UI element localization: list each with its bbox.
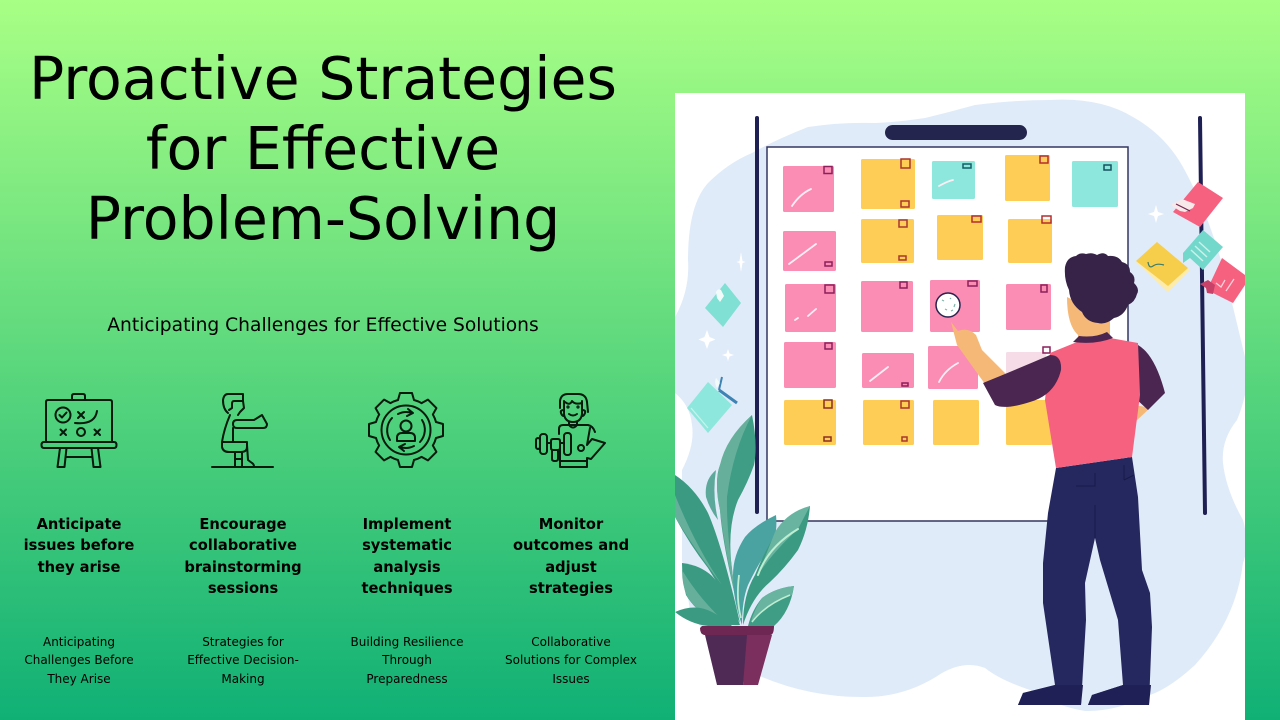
board handle <box>885 125 1027 140</box>
column heading 1 <box>24 516 134 576</box>
left pole <box>755 118 759 512</box>
lower-right leaf <box>748 586 794 626</box>
title: for Effective <box>146 114 500 182</box>
magnifier <box>936 293 960 317</box>
column heading 4: outcomes and <box>513 537 629 554</box>
column heading 3: Implement <box>363 516 451 533</box>
floating note: yellow <box>1136 242 1190 292</box>
column heading 2: collaborative <box>189 537 297 554</box>
right sleeve <box>1135 345 1165 410</box>
title <box>29 44 617 252</box>
pants and shoes <box>1018 457 1152 705</box>
plant <box>675 415 810 685</box>
neck <box>1067 297 1110 342</box>
right leaf <box>743 506 810 625</box>
icon: gear with person <box>368 392 444 468</box>
column heading 1: they arise <box>38 559 120 576</box>
column caption 3: Preparedness <box>366 672 448 686</box>
pants pockets <box>1076 465 1134 538</box>
column heading 1: Anticipate <box>37 516 121 533</box>
column caption 1: Anticipating <box>43 634 115 648</box>
column heading 2: brainstorming <box>184 559 302 576</box>
lower-left leaf <box>682 563 740 625</box>
column heading 4: Monitor <box>539 516 603 533</box>
column heading 3: systematic <box>362 537 452 554</box>
teal centre leaf <box>733 515 776 625</box>
column caption 4: Collaborative <box>531 634 611 648</box>
illustration: team at sticky-note board <box>675 93 1245 720</box>
column heading 4: adjust <box>545 559 597 576</box>
background blob <box>675 100 1246 711</box>
far-left leaf <box>675 475 740 623</box>
row 1 notes <box>783 155 1118 212</box>
column heading 3: analysis <box>373 559 441 576</box>
note scribbles <box>789 180 958 382</box>
column heading 2: Encourage <box>199 516 287 533</box>
column heading 1: issues before <box>24 537 134 554</box>
column caption 3 <box>351 634 463 686</box>
column caption 2 <box>187 634 299 686</box>
left sleeve <box>983 355 1061 407</box>
title: Proactive Strategies <box>29 44 617 112</box>
column heading 4: strategies <box>529 580 613 597</box>
tall leaf <box>717 415 756 600</box>
column caption 2: Making <box>221 672 265 686</box>
column caption 1 <box>24 634 134 686</box>
row 2 notes <box>783 215 1052 271</box>
collar <box>1073 332 1113 343</box>
right pole <box>1200 118 1205 513</box>
small back leaf <box>706 470 718 520</box>
board <box>767 147 1128 521</box>
column caption 4: Solutions for Complex <box>505 653 637 667</box>
floating note: teal with blue clip <box>687 377 737 433</box>
column caption 1: Challenges Before <box>24 653 134 667</box>
column caption 4: Issues <box>552 672 590 686</box>
row 5 notes <box>784 400 1052 445</box>
column caption 4 <box>505 634 637 686</box>
row 3 notes <box>785 280 1051 332</box>
floating note: pink bent <box>1200 258 1245 303</box>
row 4 notes <box>784 342 1046 392</box>
person <box>951 253 1165 705</box>
subtitle: Anticipating Challenges for Effective Solutions <box>107 315 539 336</box>
right hand <box>1135 405 1150 421</box>
column heading 3: techniques <box>361 580 453 597</box>
hair <box>1065 253 1138 323</box>
forearm and hand <box>951 322 1007 384</box>
sparkles <box>698 205 1164 361</box>
pot <box>705 635 750 685</box>
column caption 2: Strategies for <box>202 634 284 648</box>
column caption 3: Through <box>382 653 432 667</box>
column heading 2 <box>184 516 302 597</box>
sticky notes grid <box>783 155 1118 445</box>
column heading 3 <box>361 516 453 597</box>
column caption 3: Building Resilience <box>351 634 463 648</box>
icon: strategy easel <box>40 393 118 468</box>
floating note: teal lines <box>1183 230 1223 270</box>
column caption 2: Effective Decision- <box>187 653 299 667</box>
bottom-left leaf <box>675 608 732 626</box>
vest <box>1045 338 1140 468</box>
icon: seated person <box>211 393 274 468</box>
icon: person with dumbbell <box>535 393 606 468</box>
note corner markers <box>824 156 1111 441</box>
floating note: pink clip <box>1172 182 1223 227</box>
column heading 2: sessions <box>208 580 278 597</box>
title: Problem-Solving <box>86 184 560 252</box>
floating note: teal left <box>705 283 741 327</box>
column heading 4 <box>513 516 629 597</box>
column caption 1: They Arise <box>47 672 111 686</box>
